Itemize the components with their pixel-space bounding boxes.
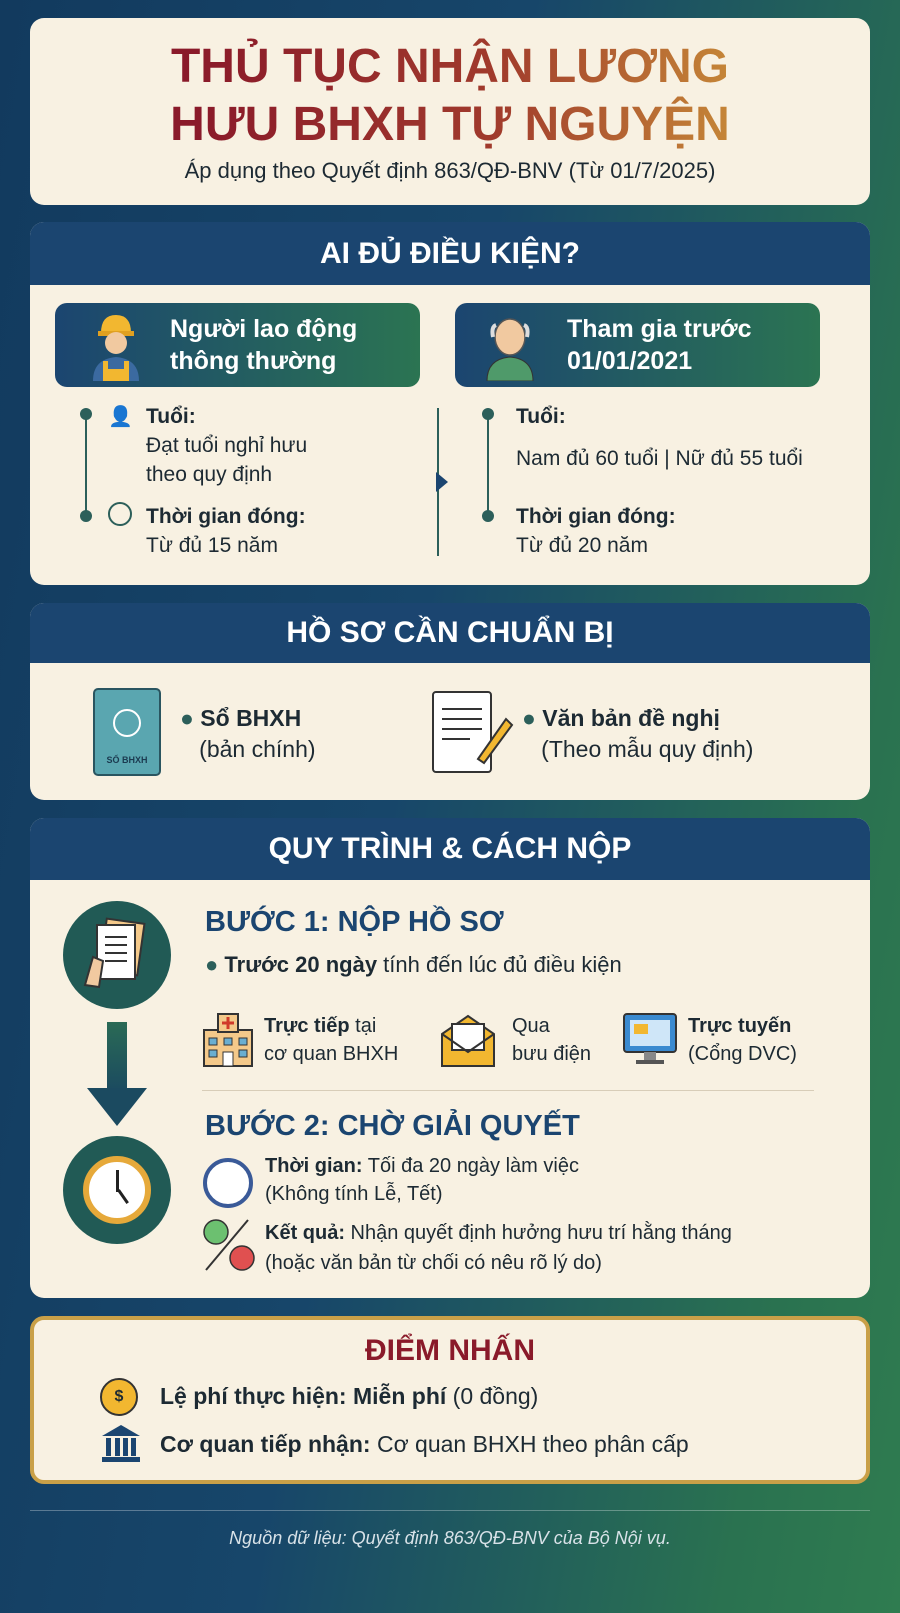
right criteria — [482, 405, 803, 557]
left criteria: Thời gian đóng: — [146, 505, 306, 528]
right criteria: Tuổi: — [516, 405, 566, 428]
heading — [30, 818, 870, 880]
right criteria: Từ đủ 20 năm — [516, 534, 648, 557]
step 1 title: BƯỚC 1: NỘP HỒ SƠ — [205, 906, 504, 938]
item: van ban de nghi — [522, 705, 753, 762]
right criteria: Nam đủ 60 tuổi | Nữ đủ 55 tuổi — [516, 447, 803, 470]
icon: clock — [108, 502, 132, 526]
icon: document with pen — [432, 691, 514, 773]
icon: elderly — [486, 318, 534, 381]
icon: step2 clock circle — [63, 1136, 171, 1244]
item: so bhxh — [180, 705, 316, 762]
method: online — [623, 1013, 797, 1065]
title — [30, 38, 870, 154]
footer source: Nguồn dữ liệu: Quyết định 863/QĐ-BNV của Bộ Nội vụ. — [229, 1528, 671, 1548]
heading: AI ĐỦ ĐIỀU KIỆN? — [320, 237, 580, 270]
left criteria: Tuổi: — [146, 405, 196, 428]
subtitle: Áp dụng theo Quyết định 863/QĐ-BNV (Từ 01/7/2025) — [185, 158, 715, 183]
icon: BHXH book: SỔ BHXH — [106, 754, 148, 765]
title: HƯU BHXH TỰ NGUYỆN — [170, 98, 730, 151]
step 2 result: (hoặc văn bản từ chối có nêu rõ lý do) — [265, 1252, 602, 1274]
panel: eligibility — [30, 222, 870, 585]
step 2 title: BƯỚC 2: CHỜ GIẢI QUYẾT — [205, 1110, 580, 1142]
method: direct: Trực tiếp tại — [264, 1015, 376, 1037]
agency: Cơ quan tiếp nhận: Cơ quan BHXH theo phân cấp — [160, 1431, 689, 1457]
item: van ban de nghi: (Theo mẫu quy định) — [541, 736, 753, 762]
sub-card: joined before 2021 — [455, 303, 820, 387]
right criteria: Thời gian đóng: — [516, 505, 676, 528]
method: online: (Cổng DVC) — [688, 1043, 797, 1065]
panel: documents — [30, 603, 870, 800]
step 2 time: (Không tính Lễ, Tết) — [265, 1183, 443, 1205]
heading — [30, 222, 870, 285]
sub-card: normal worker — [55, 303, 420, 387]
icon: check/cross — [203, 1219, 255, 1271]
sub-card: normal worker: Người lao động — [170, 315, 357, 343]
icon: worker — [93, 315, 139, 381]
icon: person: 👤 — [108, 406, 133, 428]
step 2 result — [265, 1221, 732, 1274]
method: direct: cơ quan BHXH — [264, 1043, 398, 1065]
sub-card: normal worker: thông thường — [170, 347, 336, 375]
panel: process — [30, 818, 870, 1298]
arrow: down — [87, 1022, 147, 1126]
left criteria: Đạt tuổi nghỉ hưu — [146, 434, 307, 457]
sub-card: joined before 2021: 01/01/2021 — [567, 347, 692, 375]
method: post — [441, 1014, 591, 1067]
step 1 note: ● Trước 20 ngày tính đến lúc đủ điều kiện — [205, 952, 622, 977]
item: so bhxh: ● Sổ BHXH — [180, 705, 301, 731]
divider with arrow — [436, 408, 448, 556]
fee: Lệ phí thực hiện: Miễn phí (0 đồng) — [160, 1383, 538, 1409]
icon: coin: $ — [115, 1388, 123, 1405]
heading: ĐIỂM NHẤN — [365, 1334, 535, 1367]
heading: QUY TRÌNH & CÁCH NỘP — [269, 832, 631, 865]
left criteria: Từ đủ 15 năm — [146, 534, 278, 557]
title card — [30, 18, 870, 205]
icon: building — [102, 1425, 140, 1462]
icon: BHXH book — [93, 688, 161, 776]
method: post: bưu điện — [512, 1043, 591, 1065]
method: online: Trực tuyến — [688, 1015, 791, 1037]
icon: small clock — [203, 1158, 253, 1208]
heading — [30, 603, 870, 663]
panel: highlights — [30, 1316, 870, 1484]
method: direct — [203, 1013, 398, 1067]
left criteria — [80, 405, 307, 557]
step 2 time — [265, 1155, 579, 1205]
step 2 result: Kết quả: Nhận quyết định hưởng hưu trí hằng tháng — [265, 1222, 732, 1244]
icon: step1 circle — [63, 901, 171, 1009]
item: van ban de nghi: ● Văn bản đề nghị — [522, 705, 720, 731]
left criteria: theo quy định — [146, 463, 272, 486]
icon: coin — [100, 1378, 138, 1416]
step 2 time: Thời gian: Tối đa 20 ngày làm việc — [265, 1155, 579, 1177]
heading: HỒ SƠ CẦN CHUẨN BỊ — [286, 616, 614, 649]
method: post: Qua — [512, 1015, 550, 1037]
title: THỦ TỤC NHẬN LƯƠNG — [171, 40, 729, 93]
item: so bhxh: (bản chính) — [199, 736, 316, 762]
sub-card: joined before 2021: Tham gia trước — [567, 315, 752, 343]
